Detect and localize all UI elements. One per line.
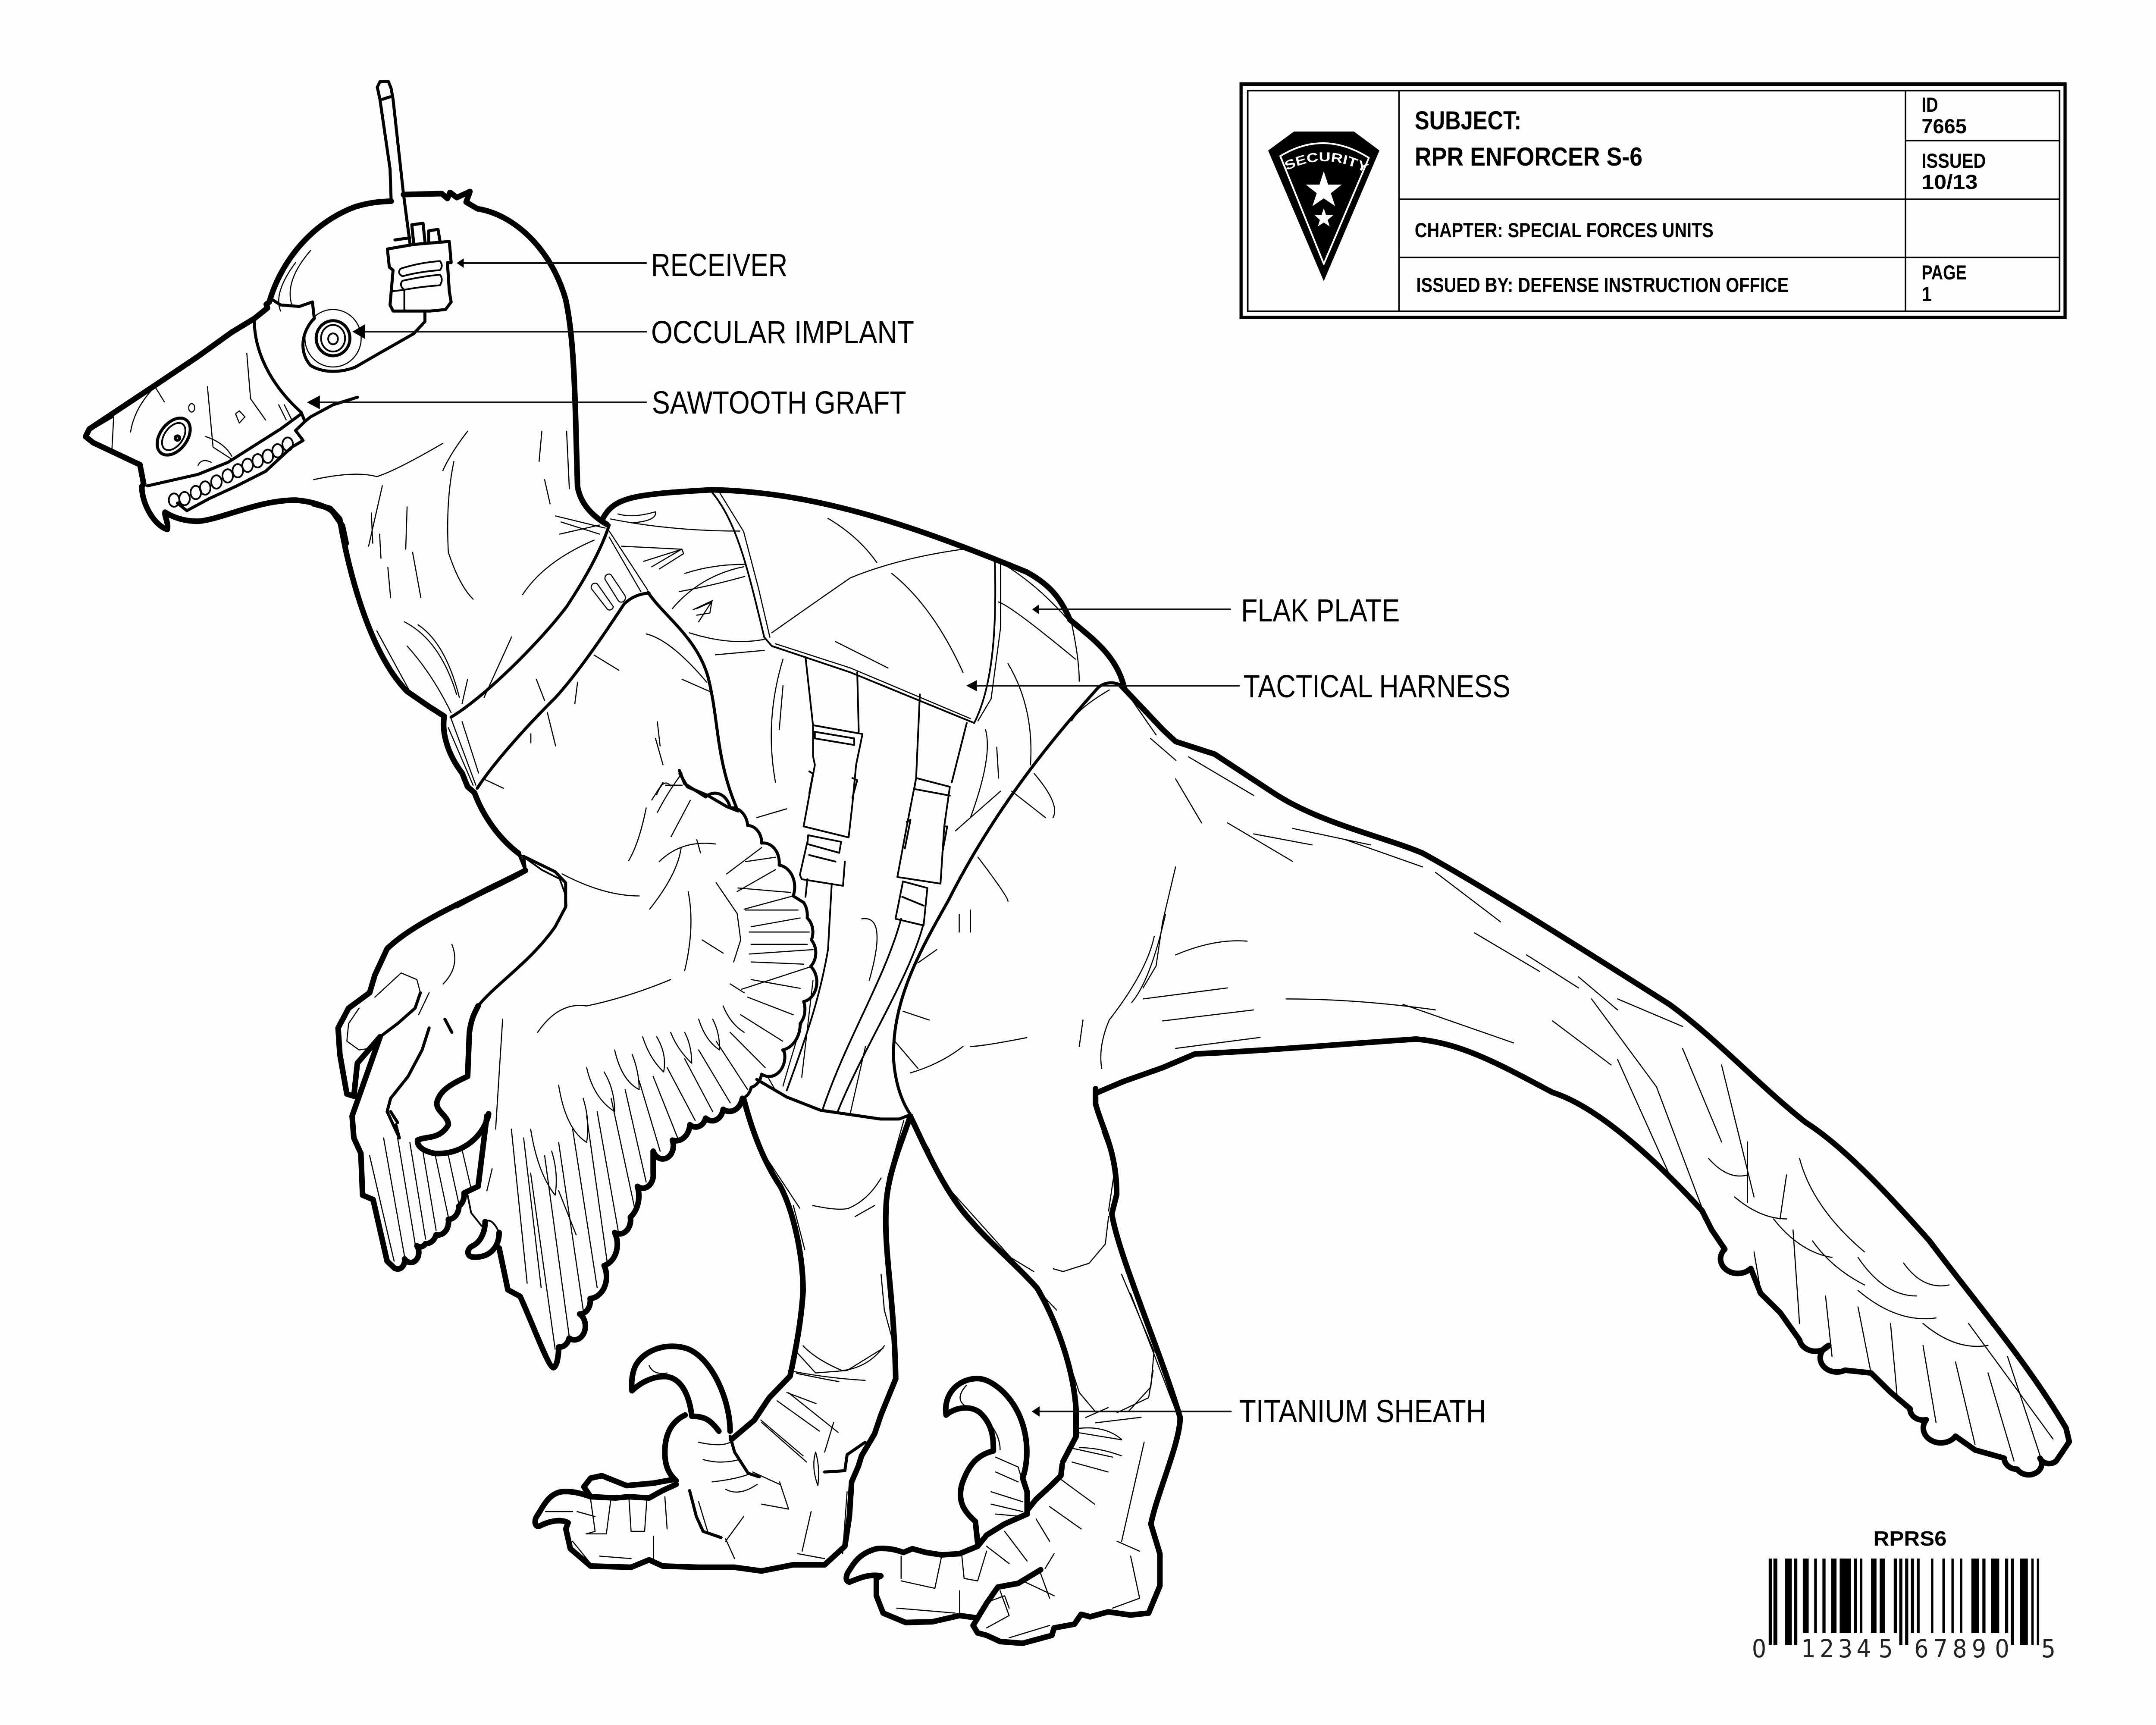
antenna (377, 82, 410, 243)
barcode digits: 12345 (1801, 1635, 1893, 1664)
icon: security badge (1268, 132, 1379, 281)
barcode digits: 67890 (1914, 1635, 2009, 1664)
flak plate (712, 492, 995, 723)
occular implant (271, 299, 425, 371)
snout eye (150, 414, 197, 459)
feathers (370, 847, 807, 1349)
right foot (846, 1465, 1062, 1622)
panel: title block: RPR ENFORCER S-6 (1415, 143, 1642, 172)
wing outer edge (680, 771, 817, 1098)
buckles and straps (787, 657, 967, 1113)
hind and fore legs upper (732, 1088, 1180, 1466)
left sickle claw (632, 1346, 730, 1431)
receiver radio (387, 223, 451, 311)
right sickle claw (946, 1379, 1027, 1543)
panel: title block (1241, 84, 2065, 317)
thumb claw (468, 1222, 499, 1257)
harness and flak plate (603, 490, 1176, 1119)
callout: sawtooth graft (307, 385, 906, 420)
callout: tactical harness: TACTICAL HARNESS (1244, 668, 1510, 704)
panel: title block: 7665 (1921, 115, 1967, 138)
callout: titanium sheath: TITANIUM SHEATH (1239, 1393, 1486, 1429)
callout: sawtooth graft: SAWTOOTH GRAFT (652, 385, 906, 420)
icon: security badge: SECURITY (1283, 150, 1370, 176)
callout: receiver (457, 247, 787, 283)
barcode (1752, 1527, 2056, 1664)
sawtooth graft (177, 421, 305, 511)
callout: tactical harness (966, 668, 1510, 704)
panel: title block: 1 (1921, 282, 1932, 305)
barcode digits: 0 (1752, 1635, 1766, 1664)
head and helmet (85, 82, 607, 543)
tactical harness edges (648, 592, 1124, 1119)
helmet and neck detail lines (93, 251, 310, 465)
callout: receiver: RECEIVER (651, 247, 787, 283)
forelimb and hand (338, 771, 817, 1367)
issued cell: ISSUED (1921, 149, 1986, 172)
panel: title block: 10/13 (1921, 170, 1977, 193)
barcode digits: 5 (2041, 1635, 2056, 1664)
callout: occular implant: OCCULAR IMPLANT (651, 314, 914, 350)
subject text: SUBJECT: (1415, 107, 1521, 135)
chapter text: CHAPTER: SPECIAL FORCES UNITS (1415, 219, 1714, 242)
hand claw (417, 1006, 489, 1154)
callout: titanium sheath (1032, 1393, 1486, 1429)
left foot (535, 1466, 859, 1571)
tail (1097, 685, 2069, 1475)
issuer text: ISSUED BY: DEFENSE INSTRUCTION OFFICE (1416, 273, 1789, 296)
id cell: ID (1921, 93, 1938, 116)
feet (535, 1294, 1180, 1643)
barcode label: RPRS6 (1874, 1527, 1947, 1550)
neck and collar (313, 431, 745, 906)
page cell: PAGE (1921, 261, 1967, 284)
barcode bars (1769, 1559, 2039, 1645)
callout: occular implant (352, 314, 914, 350)
callout: flak plate: FLAK PLATE (1241, 593, 1400, 628)
callout: flak plate (1032, 593, 1400, 628)
